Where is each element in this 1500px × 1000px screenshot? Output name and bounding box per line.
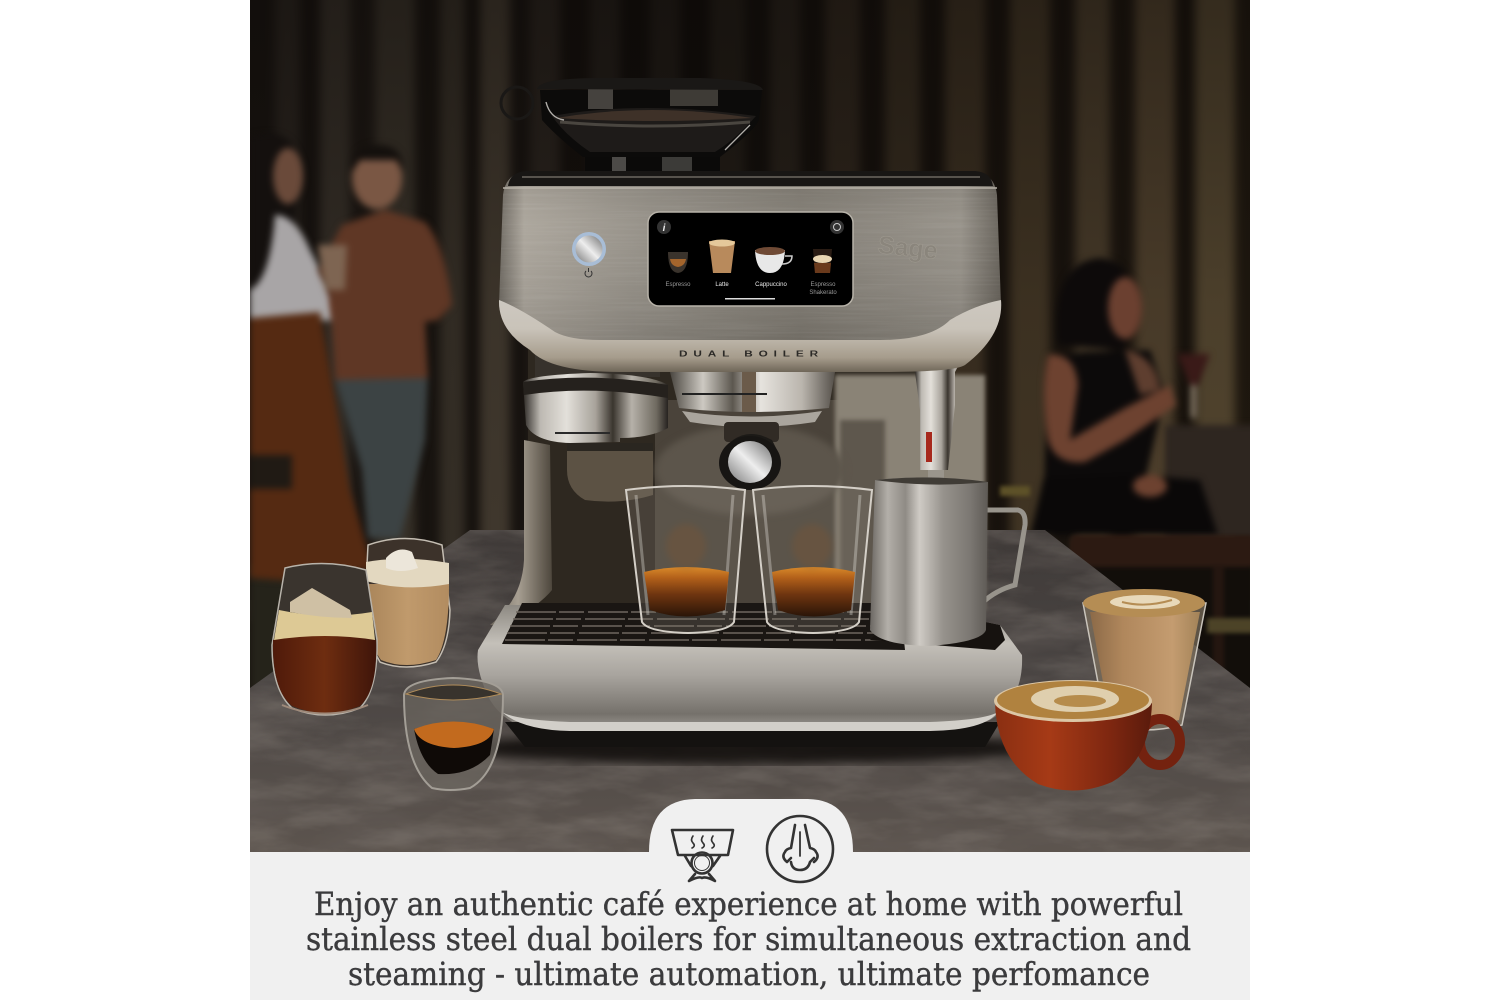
bean hopper bbox=[501, 78, 763, 178]
info button: i bbox=[663, 223, 666, 234]
dark recess bbox=[528, 340, 985, 615]
left floor bbox=[250, 578, 279, 688]
curtain backdrop bbox=[279, 0, 1245, 549]
drink: espresso shakerato: Espresso bbox=[810, 282, 836, 288]
person: woman at right bbox=[1030, 258, 1218, 535]
portafilter spout bbox=[719, 434, 781, 490]
caption text: steaming - ultimate automation, ultimate perfomance bbox=[348, 957, 1150, 993]
icon: aroma nose bbox=[767, 816, 833, 882]
machine shadow bbox=[460, 732, 1040, 764]
drink: cappuccino: Cappuccino bbox=[755, 282, 788, 288]
glass right bbox=[753, 486, 872, 633]
photo scene bbox=[230, 0, 1270, 852]
model label: DUAL BOILER bbox=[679, 350, 824, 358]
person: woman at left bbox=[250, 134, 380, 582]
drink: latte: Latte bbox=[715, 282, 729, 288]
grate bbox=[502, 603, 905, 650]
drink: latte bbox=[709, 240, 735, 288]
caption text bbox=[306, 887, 1191, 993]
person: man at left bbox=[318, 145, 452, 538]
brand logo: Sage bbox=[877, 231, 939, 265]
icon tab bbox=[649, 799, 853, 852]
power knob bbox=[572, 232, 606, 277]
grounds cup under holder bbox=[567, 445, 653, 502]
left portafilter holder bbox=[523, 355, 668, 451]
info button bbox=[657, 220, 671, 234]
settings button bbox=[830, 220, 844, 234]
front band bbox=[499, 300, 1001, 372]
infographic canvas bbox=[250, 0, 1250, 1000]
tall latte bbox=[1083, 589, 1206, 730]
drink: cappuccino bbox=[755, 247, 792, 288]
caption text: stainless steel dual boilers for simultaneous extraction and bbox=[306, 922, 1191, 958]
drink: espresso shakerato bbox=[809, 249, 837, 296]
bottom caption panel bbox=[250, 852, 1250, 1000]
icon: dual boiler group head bbox=[672, 830, 733, 881]
glass left bbox=[626, 486, 745, 633]
caption text: Enjoy an authentic café experience at home with powerful bbox=[314, 887, 1183, 923]
iced drink left bbox=[272, 563, 377, 715]
red cappuccino cup bbox=[994, 680, 1180, 791]
milk jug bbox=[870, 477, 1025, 646]
sofa right bbox=[1165, 425, 1260, 540]
stone countertop bbox=[250, 530, 1250, 852]
drink: espresso shakerato: Shakerato bbox=[809, 290, 837, 296]
left column bbox=[490, 440, 552, 625]
drink: espresso bbox=[665, 252, 691, 288]
group head bbox=[670, 372, 835, 442]
iced drink back bbox=[365, 538, 450, 667]
upper body bbox=[495, 171, 1005, 372]
background table bbox=[998, 484, 1250, 666]
drip tray bbox=[478, 603, 1022, 747]
drink: espresso: Espresso bbox=[665, 282, 691, 288]
coffee machine bbox=[478, 78, 1025, 747]
small espresso glass bbox=[404, 678, 503, 790]
steam wand bbox=[915, 368, 958, 478]
touch screen bbox=[648, 212, 853, 306]
